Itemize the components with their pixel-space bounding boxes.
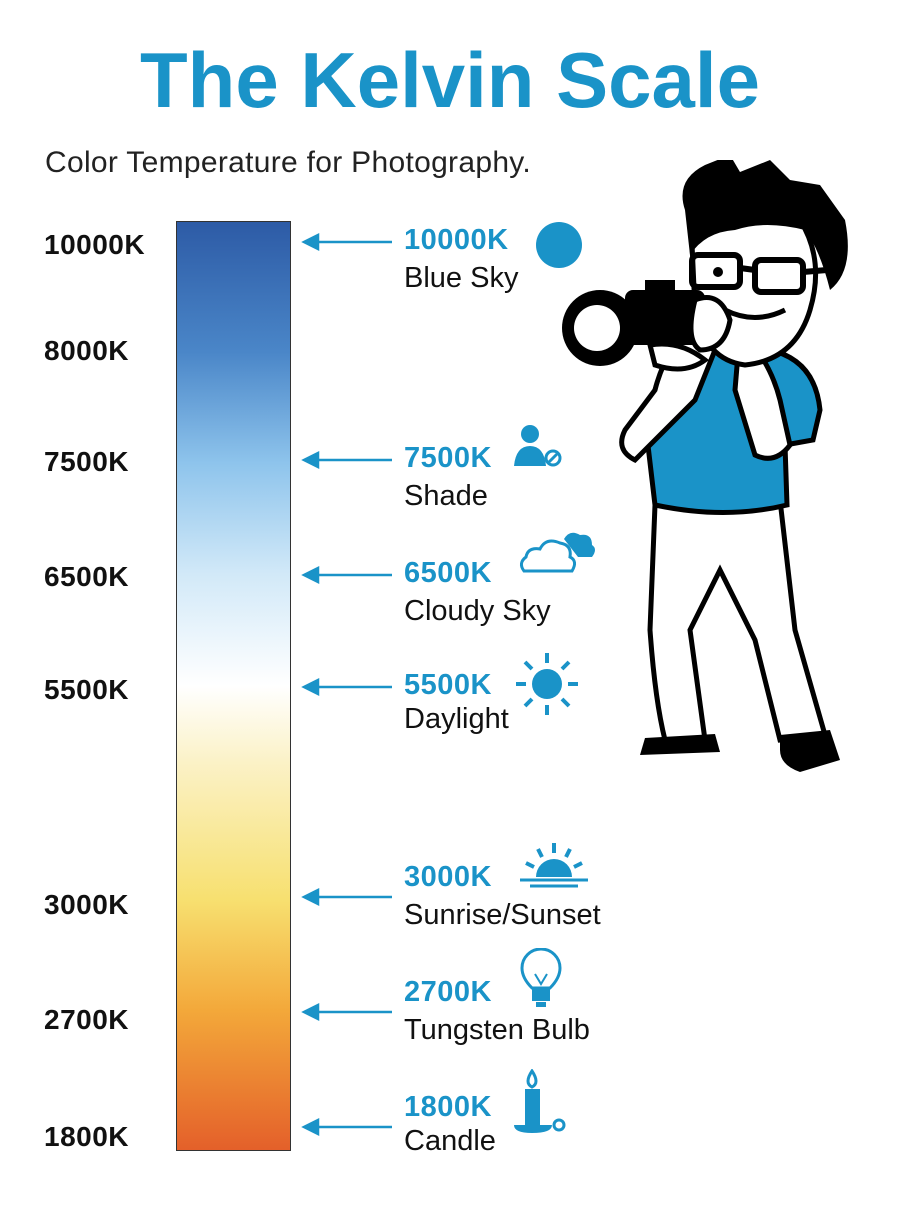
scale labels: 2700K bbox=[44, 1004, 129, 1035]
entry: sunrise: 3000K bbox=[404, 861, 492, 893]
entry: tungsten: Tungsten Bulb bbox=[404, 1014, 590, 1046]
entry: shade: Shade bbox=[404, 480, 488, 512]
entry: blue sky: Blue Sky bbox=[404, 262, 518, 294]
arrows bbox=[301, 233, 392, 1136]
hands bbox=[691, 298, 730, 350]
entry: sunrise bbox=[404, 843, 601, 931]
shirt bbox=[645, 342, 820, 512]
scale labels: 6500K bbox=[44, 561, 129, 592]
shoes bbox=[640, 734, 720, 755]
photographer illustration bbox=[562, 160, 848, 772]
scale labels: 1800K bbox=[44, 1121, 129, 1152]
camera bbox=[625, 290, 705, 345]
entry: tungsten bbox=[404, 948, 590, 1046]
entry: daylight: 5500K bbox=[404, 669, 492, 701]
scale labels: 8000K bbox=[44, 335, 129, 366]
title: The Kelvin Scale bbox=[140, 36, 760, 124]
head bbox=[690, 193, 816, 365]
entry: candle: Candle bbox=[404, 1125, 496, 1157]
scale labels: 5500K bbox=[44, 674, 129, 705]
entry: blue sky bbox=[404, 222, 582, 294]
icon: sunrise bbox=[520, 843, 588, 888]
entry: candle bbox=[404, 1069, 566, 1157]
scale labels bbox=[44, 229, 145, 1152]
entry: shade: 7500K bbox=[404, 442, 492, 474]
entry: candle: 1800K bbox=[404, 1091, 492, 1123]
scale labels: 7500K bbox=[44, 446, 129, 477]
entry: daylight bbox=[404, 653, 578, 735]
entry: tungsten: 2700K bbox=[404, 976, 492, 1008]
entry: shade bbox=[404, 425, 562, 512]
icon: candle bbox=[514, 1069, 566, 1133]
gradient bar bbox=[176, 221, 291, 1151]
icon: circle bbox=[536, 222, 582, 268]
hair bbox=[682, 155, 848, 290]
entry: daylight: Daylight bbox=[404, 703, 509, 735]
icon: cloud bbox=[520, 532, 595, 572]
scale labels: 10000K bbox=[44, 229, 145, 260]
entry: blue sky: 10000K bbox=[404, 224, 509, 256]
icon: bulb bbox=[520, 948, 562, 1007]
entry: cloudy bbox=[404, 532, 595, 627]
arm bbox=[622, 320, 715, 460]
scale labels: 3000K bbox=[44, 889, 129, 920]
icon: sun bbox=[516, 653, 578, 715]
subtitle: Color Temperature for Photography. bbox=[45, 146, 531, 179]
entry: cloudy: Cloudy Sky bbox=[404, 595, 551, 627]
entry: cloudy: 6500K bbox=[404, 557, 492, 589]
legs bbox=[650, 500, 825, 740]
entry: sunrise: Sunrise/Sunset bbox=[404, 899, 601, 931]
icon: person bbox=[514, 425, 562, 466]
glasses bbox=[692, 255, 827, 292]
